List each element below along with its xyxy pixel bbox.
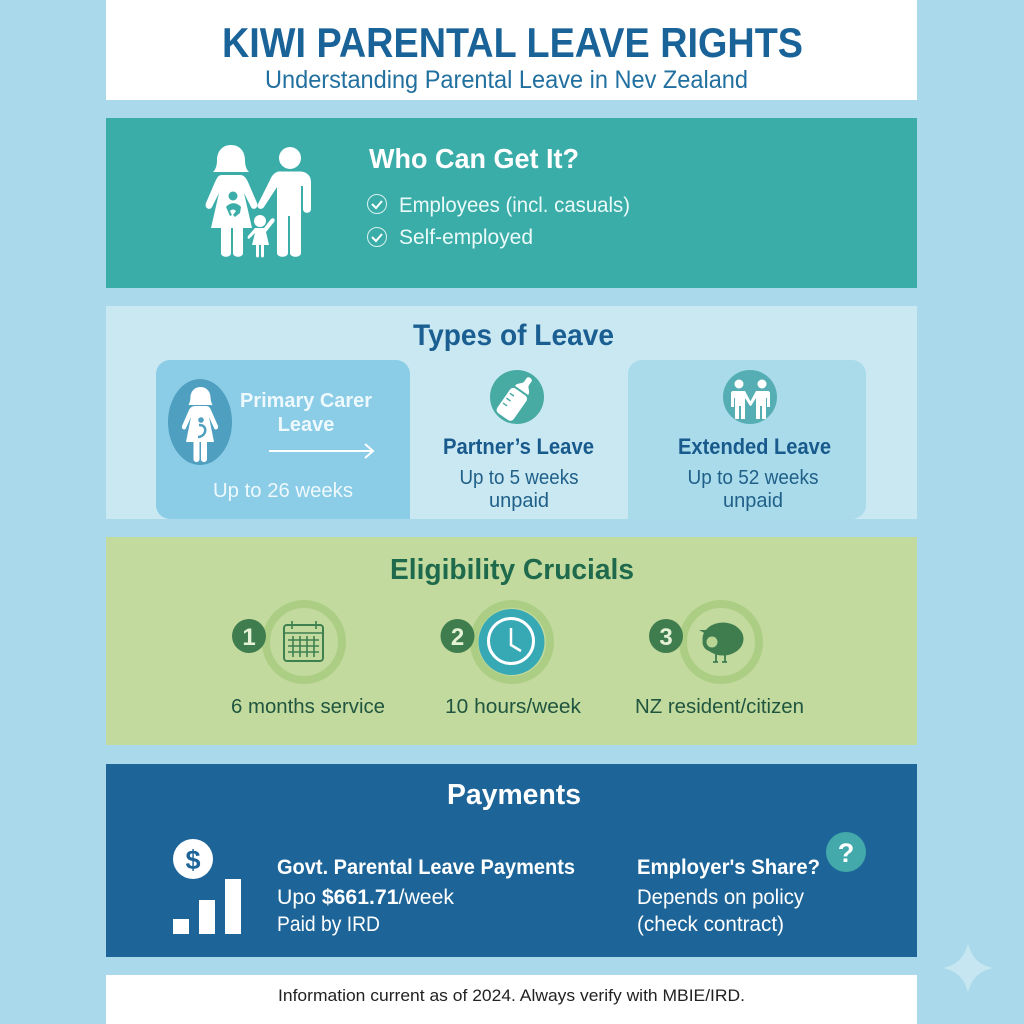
block: employer's share bbox=[637, 856, 820, 936]
label: extended leave: Extended Leave bbox=[678, 434, 831, 459]
panel: payments bbox=[106, 764, 917, 957]
icon: clock bbox=[478, 609, 544, 675]
icon: question mark bbox=[826, 832, 866, 872]
badge: 2: 2 bbox=[451, 624, 464, 651]
panel: eligibility crucials bbox=[106, 537, 917, 745]
icon: father figure bbox=[258, 147, 311, 257]
item: 6 months service bbox=[231, 604, 385, 718]
icon: dollar and bar chart: $ bbox=[185, 845, 201, 875]
item: 10 hours/week bbox=[440, 604, 582, 718]
badge: 3: 3 bbox=[659, 624, 673, 651]
list item: self-employed: Self-employed bbox=[399, 226, 533, 249]
block: government payments bbox=[277, 856, 575, 936]
card: extended leave bbox=[628, 360, 866, 519]
title: KIWI PARENTAL LEAVE RIGHTS bbox=[222, 19, 803, 66]
badge: 1: 1 bbox=[242, 624, 256, 651]
heading: who can get it: Who Can Get It? bbox=[369, 143, 579, 174]
label: primary carer leave: Leave bbox=[278, 414, 334, 436]
card: primary carer leave bbox=[156, 360, 410, 519]
header panel bbox=[106, 0, 917, 100]
block: employer's share: Depends on policy bbox=[637, 886, 804, 909]
footer bbox=[106, 975, 917, 1024]
heading: eligibility crucials: Eligibility Crucials bbox=[390, 554, 634, 586]
icon: baby on mother bbox=[226, 192, 241, 217]
icon: pregnant mother bbox=[168, 379, 232, 465]
block: employer's share: (check contract) bbox=[637, 913, 784, 936]
block: government payments: Govt. Parental Leave Payments bbox=[277, 856, 575, 879]
icon: dollar and bar chart bbox=[173, 839, 241, 934]
icon: mother figure bbox=[206, 145, 257, 257]
badge: 1 bbox=[232, 619, 266, 653]
label: NZ resident/citizen bbox=[635, 696, 804, 718]
icon: kiwi bbox=[699, 622, 744, 662]
block: government payments: Upo $661.71/week bbox=[277, 886, 455, 909]
icon: question mark: ? bbox=[838, 838, 854, 868]
block: government payments: Paid by IRD bbox=[277, 913, 380, 936]
label: 6 months service bbox=[231, 696, 385, 718]
icon: sparkle bbox=[943, 943, 993, 993]
item: NZ resident/citizen bbox=[635, 604, 804, 718]
list item: employees: Employees (incl. casuals) bbox=[399, 194, 630, 217]
label: primary carer leave: Primary Carer bbox=[240, 390, 372, 412]
panel: types of leave bbox=[106, 306, 917, 519]
label: 10 hours/week bbox=[445, 696, 582, 718]
label: partner's leave: Partner’s Leave bbox=[443, 434, 594, 459]
panel: who can get it bbox=[106, 118, 917, 288]
duration: 5 weeks unpaid: Up to 5 weeks bbox=[460, 467, 578, 489]
heading: types of leave: Types of Leave bbox=[413, 319, 614, 352]
icon: two people bbox=[723, 370, 777, 424]
icon: baby bottle bbox=[490, 370, 544, 424]
duration: 52 weeks unpaid: unpaid bbox=[723, 490, 783, 512]
badge: 2 bbox=[440, 619, 474, 653]
arrow bbox=[269, 444, 373, 458]
block: employer's share: Employer's Share? bbox=[637, 856, 820, 879]
icon: calendar bbox=[284, 621, 323, 661]
icon: child figure bbox=[248, 215, 275, 258]
icon: family bbox=[206, 145, 311, 258]
duration: 52 weeks unpaid: Up to 52 weeks bbox=[688, 467, 818, 489]
card: partner's leave bbox=[443, 370, 594, 512]
subtitle: Understanding Parental Leave in Nev Zealand bbox=[265, 66, 748, 94]
footer: Information current as of 2024. Always verify with MBIE/IRD. bbox=[278, 987, 745, 1005]
duration: 5 weeks unpaid: unpaid bbox=[489, 490, 549, 512]
duration: 26 weeks: Up to 26 weeks bbox=[213, 480, 353, 502]
badge: 3 bbox=[649, 619, 683, 653]
heading: payments: Payments bbox=[447, 779, 581, 811]
